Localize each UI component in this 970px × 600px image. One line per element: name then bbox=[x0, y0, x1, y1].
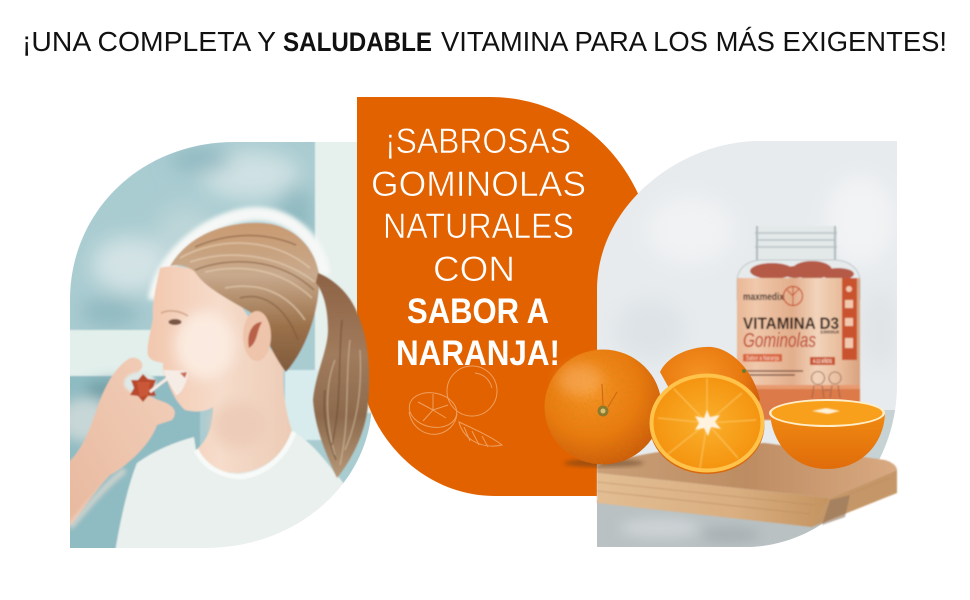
window frame bbox=[315, 138, 376, 413]
neck and face bbox=[147, 266, 292, 473]
flavour tag: Sabor a Naranja bbox=[746, 356, 779, 362]
gummy bbox=[130, 374, 156, 402]
icon: brand tree bbox=[784, 286, 802, 306]
hair halo bbox=[155, 214, 324, 300]
brand: maxmedix bbox=[743, 291, 784, 303]
heading text: NATURALES bbox=[383, 207, 574, 246]
board bbox=[597, 443, 897, 527]
jar label bbox=[737, 278, 860, 418]
icon: orange sketch bbox=[406, 366, 502, 447]
ponytail over orange panel bbox=[313, 273, 369, 478]
hair bbox=[170, 223, 319, 372]
title: SALUDABLE bbox=[283, 27, 432, 57]
heading text: GOMINOLAS bbox=[371, 165, 586, 204]
age tag: 4-12 AÑOS bbox=[813, 358, 832, 365]
title bbox=[22, 26, 947, 57]
orange panel bbox=[357, 97, 640, 496]
bottle: 1000UI bbox=[820, 330, 839, 334]
shirt bbox=[115, 431, 345, 552]
ear bbox=[243, 311, 271, 361]
bottle: Gominolas bbox=[743, 330, 816, 352]
jar shoulder bbox=[737, 260, 860, 300]
mouth bbox=[163, 370, 188, 395]
orange: half right bbox=[769, 399, 885, 469]
photo panel: girl eating a gummy bbox=[59, 138, 376, 552]
heading text bbox=[371, 122, 586, 373]
title: ¡UNA COMPLETA Y bbox=[22, 26, 276, 57]
orange: whole back bbox=[660, 347, 760, 430]
jar neck bbox=[755, 226, 837, 262]
flavour tag bbox=[743, 354, 782, 362]
gummies bbox=[750, 261, 854, 280]
kids sketch bbox=[812, 372, 841, 398]
orange: cut face bbox=[650, 374, 764, 474]
heading text: ¡SABROSAS bbox=[385, 122, 571, 161]
heading text: SABOR A bbox=[407, 292, 549, 331]
photo panel: bottle and oranges bbox=[544, 141, 900, 550]
title: VITAMINA PARA LOS MÁS EXIGENTES! bbox=[441, 26, 947, 57]
age tag bbox=[810, 357, 835, 365]
bottle bbox=[737, 226, 860, 420]
heading text: CON bbox=[433, 250, 515, 289]
orange: whole left bbox=[544, 350, 662, 467]
heading text: NARANJA! bbox=[396, 334, 560, 373]
hand and arm bbox=[70, 357, 176, 526]
product name: VITAMINA D3 bbox=[743, 314, 839, 333]
eye and brow bbox=[168, 319, 182, 325]
